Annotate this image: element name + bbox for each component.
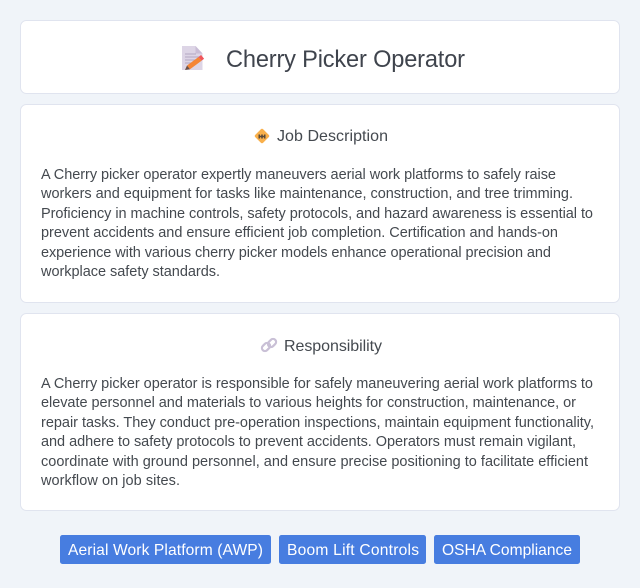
text block: responsibility: workflow on job sites. <box>40 473 180 489</box>
text block: job description: prevent accidents and ensure efficient job completion. Certification and hands-on <box>41 225 558 241</box>
panel: title card <box>20 20 620 94</box>
text block: responsibility <box>40 376 594 489</box>
text block: job description: workplace safety standards. <box>40 264 220 280</box>
text block: responsibility: and adhere to safety protocols to prevent accidents. Operators must remain vigilant, <box>41 434 576 450</box>
tag: osha compliance <box>434 535 580 564</box>
heading: responsibility: Responsibility <box>284 338 382 355</box>
text block: job description: workers and equipment for tasks like maintenance, construction, and tree trimming. <box>40 186 573 202</box>
tag: aerial work platform <box>60 535 271 564</box>
text block: responsibility: repair tasks. They conduct pre-operation inspections, maintain equipment functionality, <box>41 415 594 431</box>
icon: document with pencil <box>182 46 204 70</box>
text block: responsibility: elevate personnel and materials to various heights for construction, maintenance, or <box>41 395 576 411</box>
text block: job description: experience with various cherry picker models enhance operational precision and <box>41 245 551 261</box>
text block: job description: A Cherry picker operator expertly maneuvers aerial work platforms to safely raise <box>41 167 556 183</box>
heading: job description: Job Description <box>277 128 388 145</box>
panel: responsibility <box>20 314 620 510</box>
text block: responsibility: coordinate with ground personnel, and ensure precise positioning to facilitate efficient <box>41 454 588 470</box>
icon: orange diamond sign <box>254 128 270 144</box>
tag: boom lift controls <box>279 535 426 564</box>
panel: job description <box>20 104 620 302</box>
text block: job description: Proficiency in machine controls, safety protocols, and hazard awareness is essential to <box>41 206 593 222</box>
tag: boom lift controls: Boom Lift Controls <box>287 542 419 559</box>
text block: job description <box>40 167 593 280</box>
text block: responsibility: A Cherry picker operator is responsible for safely maneuvering aerial work platforms to <box>41 376 593 392</box>
tag: aerial work platform: Aerial Work Platform (AWP) <box>68 542 263 559</box>
tag: osha compliance: OSHA Compliance <box>442 542 572 559</box>
title: Cherry Picker Operator <box>226 47 465 73</box>
icon: chain link <box>261 338 277 352</box>
